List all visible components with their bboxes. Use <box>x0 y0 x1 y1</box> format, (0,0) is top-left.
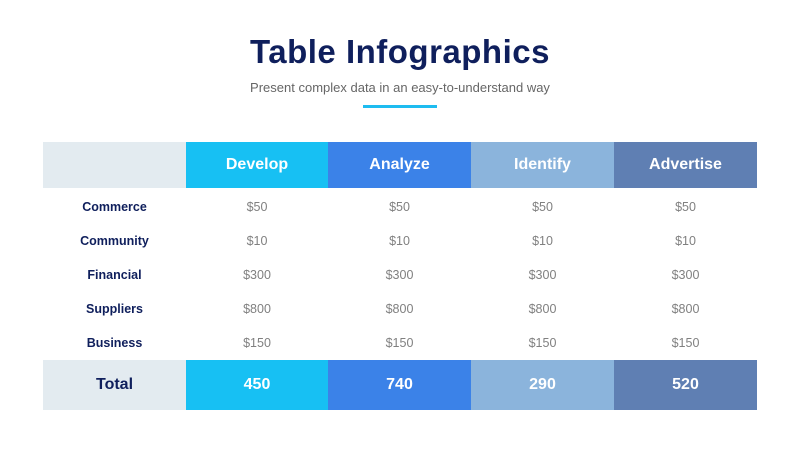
data rows: $800 <box>243 302 271 316</box>
header row <box>43 142 757 188</box>
table <box>43 142 757 410</box>
data rows: $50 <box>675 200 696 214</box>
data rows: $50 <box>389 200 410 214</box>
data rows: Financial <box>87 268 142 282</box>
data rows: $150 <box>529 336 556 350</box>
header row: Identify <box>514 156 571 173</box>
data rows: Commerce <box>82 200 147 214</box>
data rows: $300 <box>386 268 413 282</box>
data rows: $10 <box>532 234 553 248</box>
header row: Develop <box>226 156 288 173</box>
data rows: $10 <box>247 234 267 248</box>
data rows: $50 <box>532 200 553 214</box>
data rows: $800 <box>386 302 413 316</box>
data rows: $300 <box>529 268 556 282</box>
total row: 520 <box>672 376 699 393</box>
total row <box>43 360 757 410</box>
title: Table Infographics <box>250 33 550 70</box>
subtitle: Present complex data in an easy-to-understand way <box>250 80 550 94</box>
total row: Total <box>96 376 133 393</box>
data rows: $300 <box>672 268 699 282</box>
data rows: $150 <box>386 336 413 350</box>
data rows: Community <box>80 234 149 248</box>
data rows: $150 <box>672 336 699 350</box>
total row: 740 <box>386 376 413 393</box>
data rows: $50 <box>247 200 267 214</box>
data rows: $800 <box>529 302 556 316</box>
data rows: Business <box>87 336 142 350</box>
header row: Analyze <box>369 156 430 173</box>
total row: 290 <box>529 376 556 393</box>
data rows: $800 <box>672 302 699 316</box>
data rows <box>80 200 699 350</box>
data rows: Suppliers <box>86 302 143 316</box>
data rows: $300 <box>243 268 271 282</box>
accent line <box>363 105 437 108</box>
header row: Advertise <box>649 156 722 173</box>
data rows: $10 <box>389 234 410 248</box>
data rows: $150 <box>243 336 271 350</box>
data rows: $10 <box>675 234 696 248</box>
total row: 450 <box>244 376 270 393</box>
